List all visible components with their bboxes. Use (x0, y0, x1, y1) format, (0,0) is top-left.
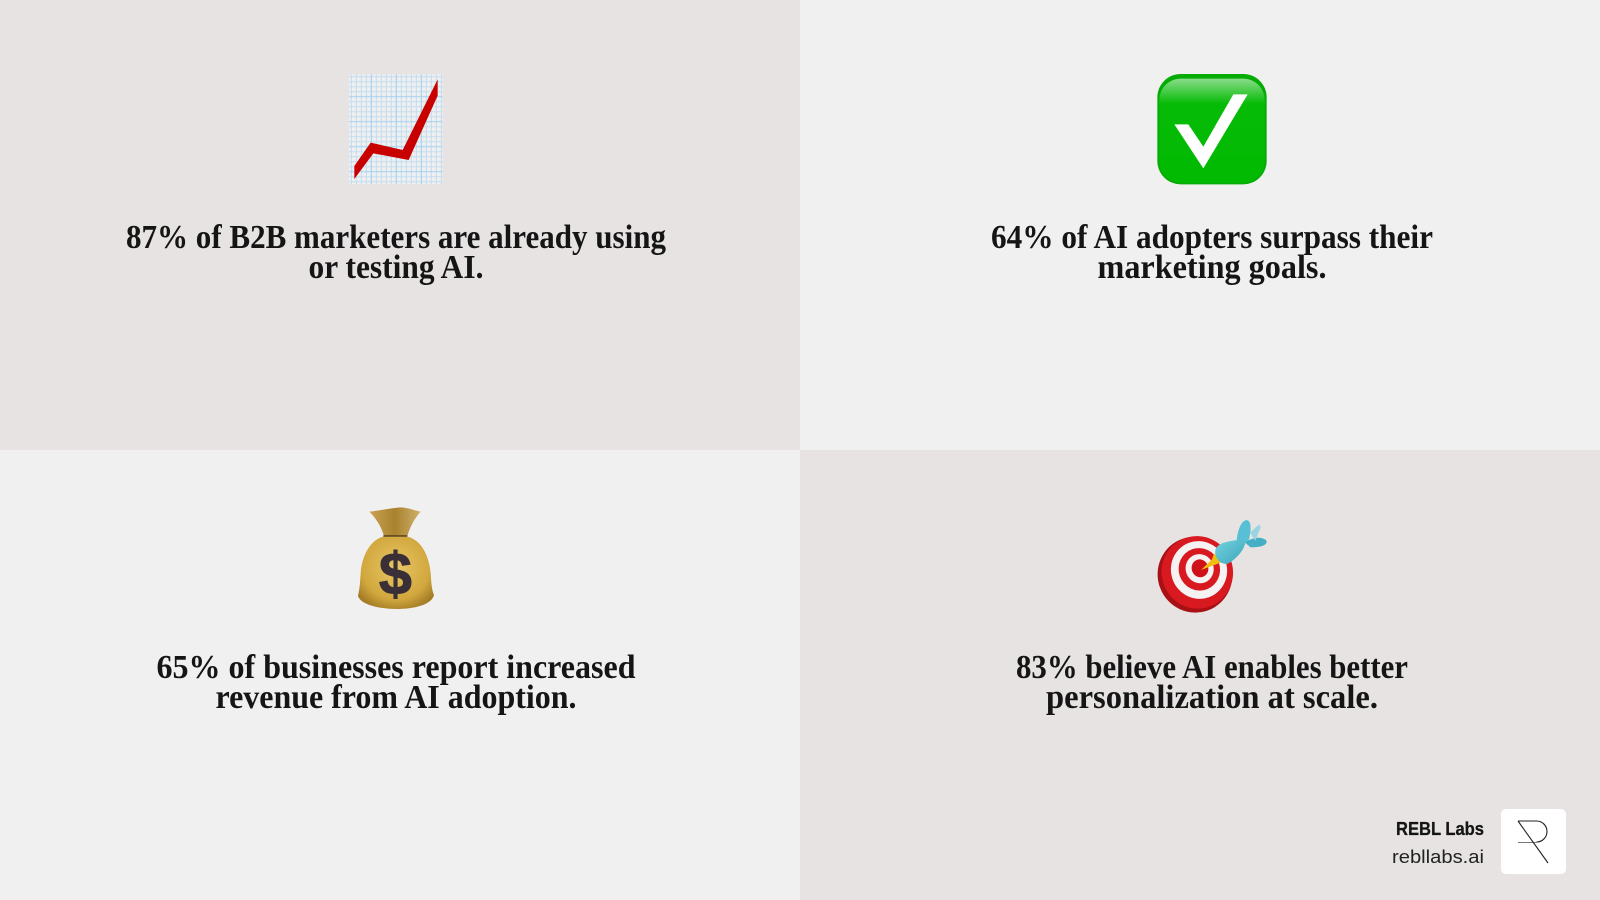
heading: 64% stat: 64% of AI adopters surpass their (991, 219, 1433, 256)
icon: dart hitting target (1147, 520, 1267, 623)
panel: 64% of AI adopters (800, 0, 1600, 450)
brand block: REBL Labs (1392, 809, 1566, 874)
heading: 83% stat: personalization at scale. (1046, 679, 1378, 716)
heading: 65% stat: revenue from AI adoption. (216, 679, 576, 716)
heading: 83% stat: 83% believe AI enables better (1016, 649, 1408, 686)
brand url: rebllabs.ai (1392, 846, 1484, 867)
panel: 83% believe AI (800, 450, 1600, 900)
heading: 64% stat: marketing goals. (1098, 249, 1326, 286)
icon: money bag: $ (379, 540, 412, 607)
panel: 87% of B2B marketers (0, 0, 800, 450)
icon: money bag (358, 507, 434, 609)
heading: 87% stat: 87% of B2B marketers are already using (126, 219, 666, 256)
heading: 87% stat: or testing AI. (308, 249, 484, 286)
icon: green check mark (1157, 74, 1267, 184)
logo tile (1501, 809, 1566, 874)
panel: 65% of businesses (0, 450, 800, 900)
brand name: REBL Labs (1396, 818, 1484, 839)
icon: rising line chart (349, 74, 443, 184)
heading: 65% stat: 65% of businesses report increased (156, 649, 636, 686)
